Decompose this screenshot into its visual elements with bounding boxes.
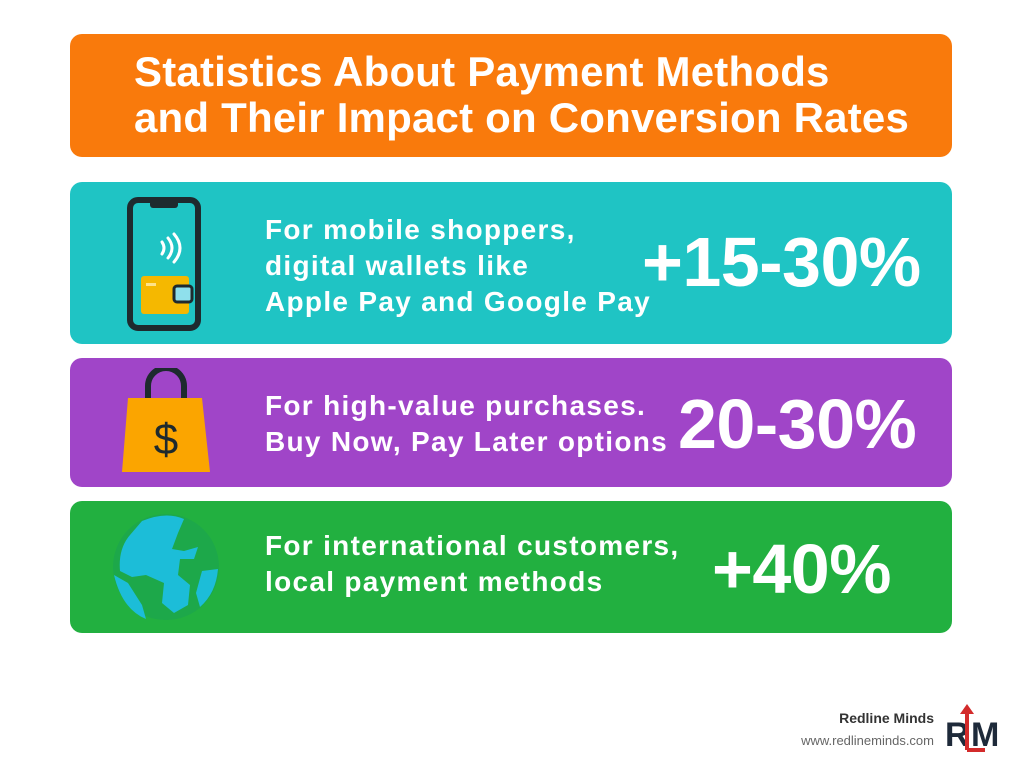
panel: international — [70, 501, 952, 633]
title text: and Their Impact on Conversion Rates — [134, 94, 909, 141]
panel: digital wallets — [70, 182, 952, 344]
stat: +15-30%: +15-30% — [642, 223, 921, 301]
brand name: Redline Minds — [839, 710, 934, 726]
text: international customers: For international customers, — [265, 530, 679, 561]
icon: shopping bag: $ — [154, 415, 178, 464]
icon: shopping bag — [122, 368, 210, 472]
icon: globe — [113, 514, 219, 620]
text: high-value purchases — [265, 390, 668, 457]
panel: BNPL — [70, 358, 952, 487]
text: international customers — [265, 530, 679, 597]
text: international customers: local payment methods — [265, 566, 604, 597]
icon: phone with wallet — [127, 197, 201, 331]
text: high-value purchases: Buy Now, Pay Later options — [265, 426, 668, 457]
logo: R — [945, 716, 970, 754]
stat: +40%: +40% — [712, 530, 891, 608]
title banner — [70, 34, 952, 157]
text: mobile shoppers — [265, 214, 651, 317]
logo: M — [971, 716, 999, 754]
text: mobile shoppers: digital wallets like — [265, 250, 529, 281]
brand footer — [801, 704, 999, 754]
text: high-value purchases: For high-value purchases. — [265, 390, 646, 421]
title text: Statistics About Payment Methods — [134, 48, 830, 95]
stat: 20-30%: 20-30% — [678, 385, 916, 463]
brand url: www.redlineminds.com — [801, 733, 934, 748]
title text — [134, 48, 909, 141]
logo — [945, 704, 999, 754]
text: mobile shoppers: Apple Pay and Google Pay — [265, 286, 651, 317]
text: mobile shoppers: For mobile shoppers, — [265, 214, 576, 245]
